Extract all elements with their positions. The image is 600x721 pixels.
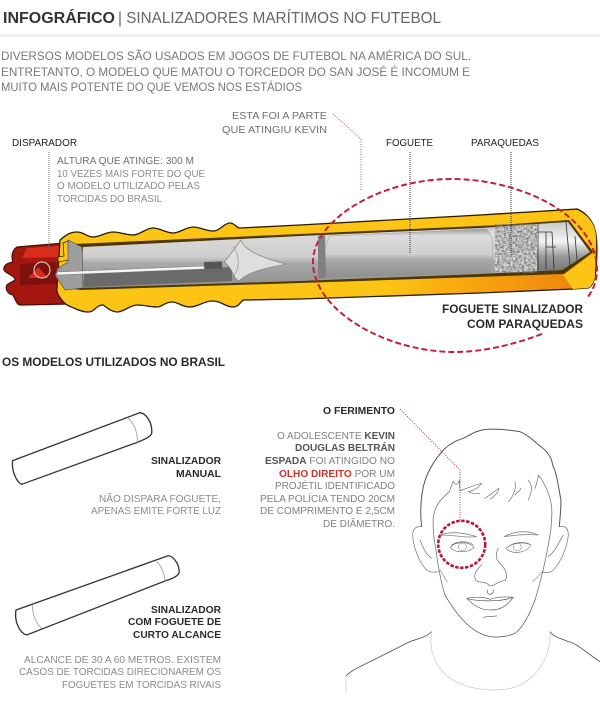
brown inner lining xyxy=(68,220,593,290)
height note xyxy=(57,155,205,205)
cheek lines xyxy=(440,570,543,582)
wound text: DE COMPRIMENTO E 2,5CM xyxy=(260,505,395,517)
rod xyxy=(57,266,205,275)
label: disparador: DISPARADOR xyxy=(12,137,77,149)
title xyxy=(3,8,441,27)
red trigger base xyxy=(4,243,68,305)
ears xyxy=(413,526,568,573)
title: INFOGRÁFICO xyxy=(3,8,115,27)
icon: short-range flare xyxy=(16,556,179,635)
fringe strands xyxy=(449,475,552,507)
description: manual flare: APENAS EMITE FORTE LUZ xyxy=(91,505,222,517)
label: part that hit Kevin: ESTA FOI A PARTE xyxy=(232,110,327,122)
yellow top band xyxy=(300,210,596,252)
label: manual flare: MANUAL xyxy=(176,468,222,480)
pointer: paraquedas xyxy=(510,152,512,255)
intro text xyxy=(1,48,471,94)
label: short-range flare: CURTO ALCANCE xyxy=(133,629,221,641)
height note: ALTURA QUE ATINGE: 300 M xyxy=(57,155,194,167)
pointer: disparador xyxy=(48,152,50,249)
intro text: MUITO MAIS POTENTE DO QUE VEMOS NOS ESTÁDIOS xyxy=(1,79,302,94)
shoulders xyxy=(346,632,432,676)
section heading: OS MODELOS UTILIZADOS NO BRASIL xyxy=(2,355,225,369)
height note: O MODELO UTILIZADO PELAS xyxy=(57,180,200,192)
yellow body xyxy=(57,209,597,312)
wound text: O ADOLESCENTE KEVIN xyxy=(277,430,395,442)
wound text: PROJÉTIL IDENTIFICADO xyxy=(275,479,395,492)
jaw outline xyxy=(445,595,535,637)
description: short-range flare: CASOS DE TORCIDAS DIRECIONAREM OS xyxy=(19,666,221,678)
flare caption: FOGUETE SINALIZADOR xyxy=(442,302,583,316)
dark lower channel xyxy=(84,267,232,287)
gray inner tube xyxy=(80,222,590,288)
pointer: foguete xyxy=(409,152,411,253)
wound marker circle xyxy=(438,521,485,568)
description: manual flare: NÃO DISPARA FOGUETE, xyxy=(99,492,221,505)
ogive xyxy=(224,240,286,281)
flare caption: COM PARAQUEDAS xyxy=(467,317,583,331)
yellow tip face xyxy=(563,252,595,289)
icon: manual flare xyxy=(12,413,152,484)
neck collar xyxy=(346,632,550,693)
pointer: part that hit Kevin xyxy=(333,114,361,190)
label: short-range flare: COM FOGUETE DE xyxy=(128,616,221,628)
heading: the wound: O FERIMENTO xyxy=(323,405,395,417)
label: paraquedas: PARAQUEDAS xyxy=(471,137,539,149)
label: manual flare: SINALIZADOR xyxy=(151,455,221,467)
title: | SINALIZADORES MARÍTIMOS NO FUTEBOL xyxy=(118,8,441,27)
yellow brackets around cap xyxy=(58,241,69,262)
description: short-range flare: FOGUETES EM TORCIDAS RIVAIS xyxy=(62,679,221,691)
description: short-range flare xyxy=(19,654,221,691)
description: short-range flare: ALCANCE DE 30 A 60 METROS. EXISTEM xyxy=(24,654,221,666)
height note: TORCIDAS DO BRASIL xyxy=(57,193,162,205)
label: foguete: FOGUETE xyxy=(386,137,433,149)
label: manual flare xyxy=(151,455,222,480)
wound text: PELA POLÍCIA TENDO 20CM xyxy=(260,492,395,505)
intro text: DIVERSOS MODELOS SÃO USADOS EM JOGOS DE FUTEBOL NA AMÉRICA DO SUL. xyxy=(1,48,471,63)
label: part that hit Kevin xyxy=(222,110,327,136)
label: short-range flare xyxy=(128,604,221,641)
red dashed ellipse xyxy=(313,179,597,352)
wound text xyxy=(260,430,395,530)
parachute xyxy=(495,224,537,273)
hair and head outline xyxy=(421,429,561,527)
mouth xyxy=(467,590,513,617)
eyebrows xyxy=(440,532,538,537)
rocket body xyxy=(324,229,493,278)
flare illustration xyxy=(4,152,597,312)
nose xyxy=(475,548,507,586)
eyes xyxy=(450,542,531,552)
head and upper features xyxy=(413,429,568,600)
face illustration xyxy=(346,429,600,693)
description: manual flare xyxy=(91,492,222,517)
intro text: ENTRETANTO, O MODELO QUE MATOU O TORCEDOR DO SAN JOSÉ É INCOMUM E xyxy=(1,64,470,79)
nose details xyxy=(537,222,590,271)
wound text: DOUGLAS BELTRÁN xyxy=(295,441,395,454)
gray cap xyxy=(55,240,83,290)
face sides upper xyxy=(433,492,552,600)
label: part that hit Kevin: QUE ATINGIU KEVIN xyxy=(222,124,327,136)
wound text: OLHO DIREITO POR UM xyxy=(279,468,395,480)
flare caption xyxy=(442,302,583,331)
height note: 10 VEZES MAIS FORTE DO QUE xyxy=(57,168,205,180)
wound text: DE DIÂMETRO. xyxy=(323,517,395,530)
wound pointer xyxy=(400,409,460,521)
label: short-range flare: SINALIZADOR xyxy=(151,604,221,616)
wound text: ESPADA FOI ATINGIDO NO xyxy=(265,455,395,467)
